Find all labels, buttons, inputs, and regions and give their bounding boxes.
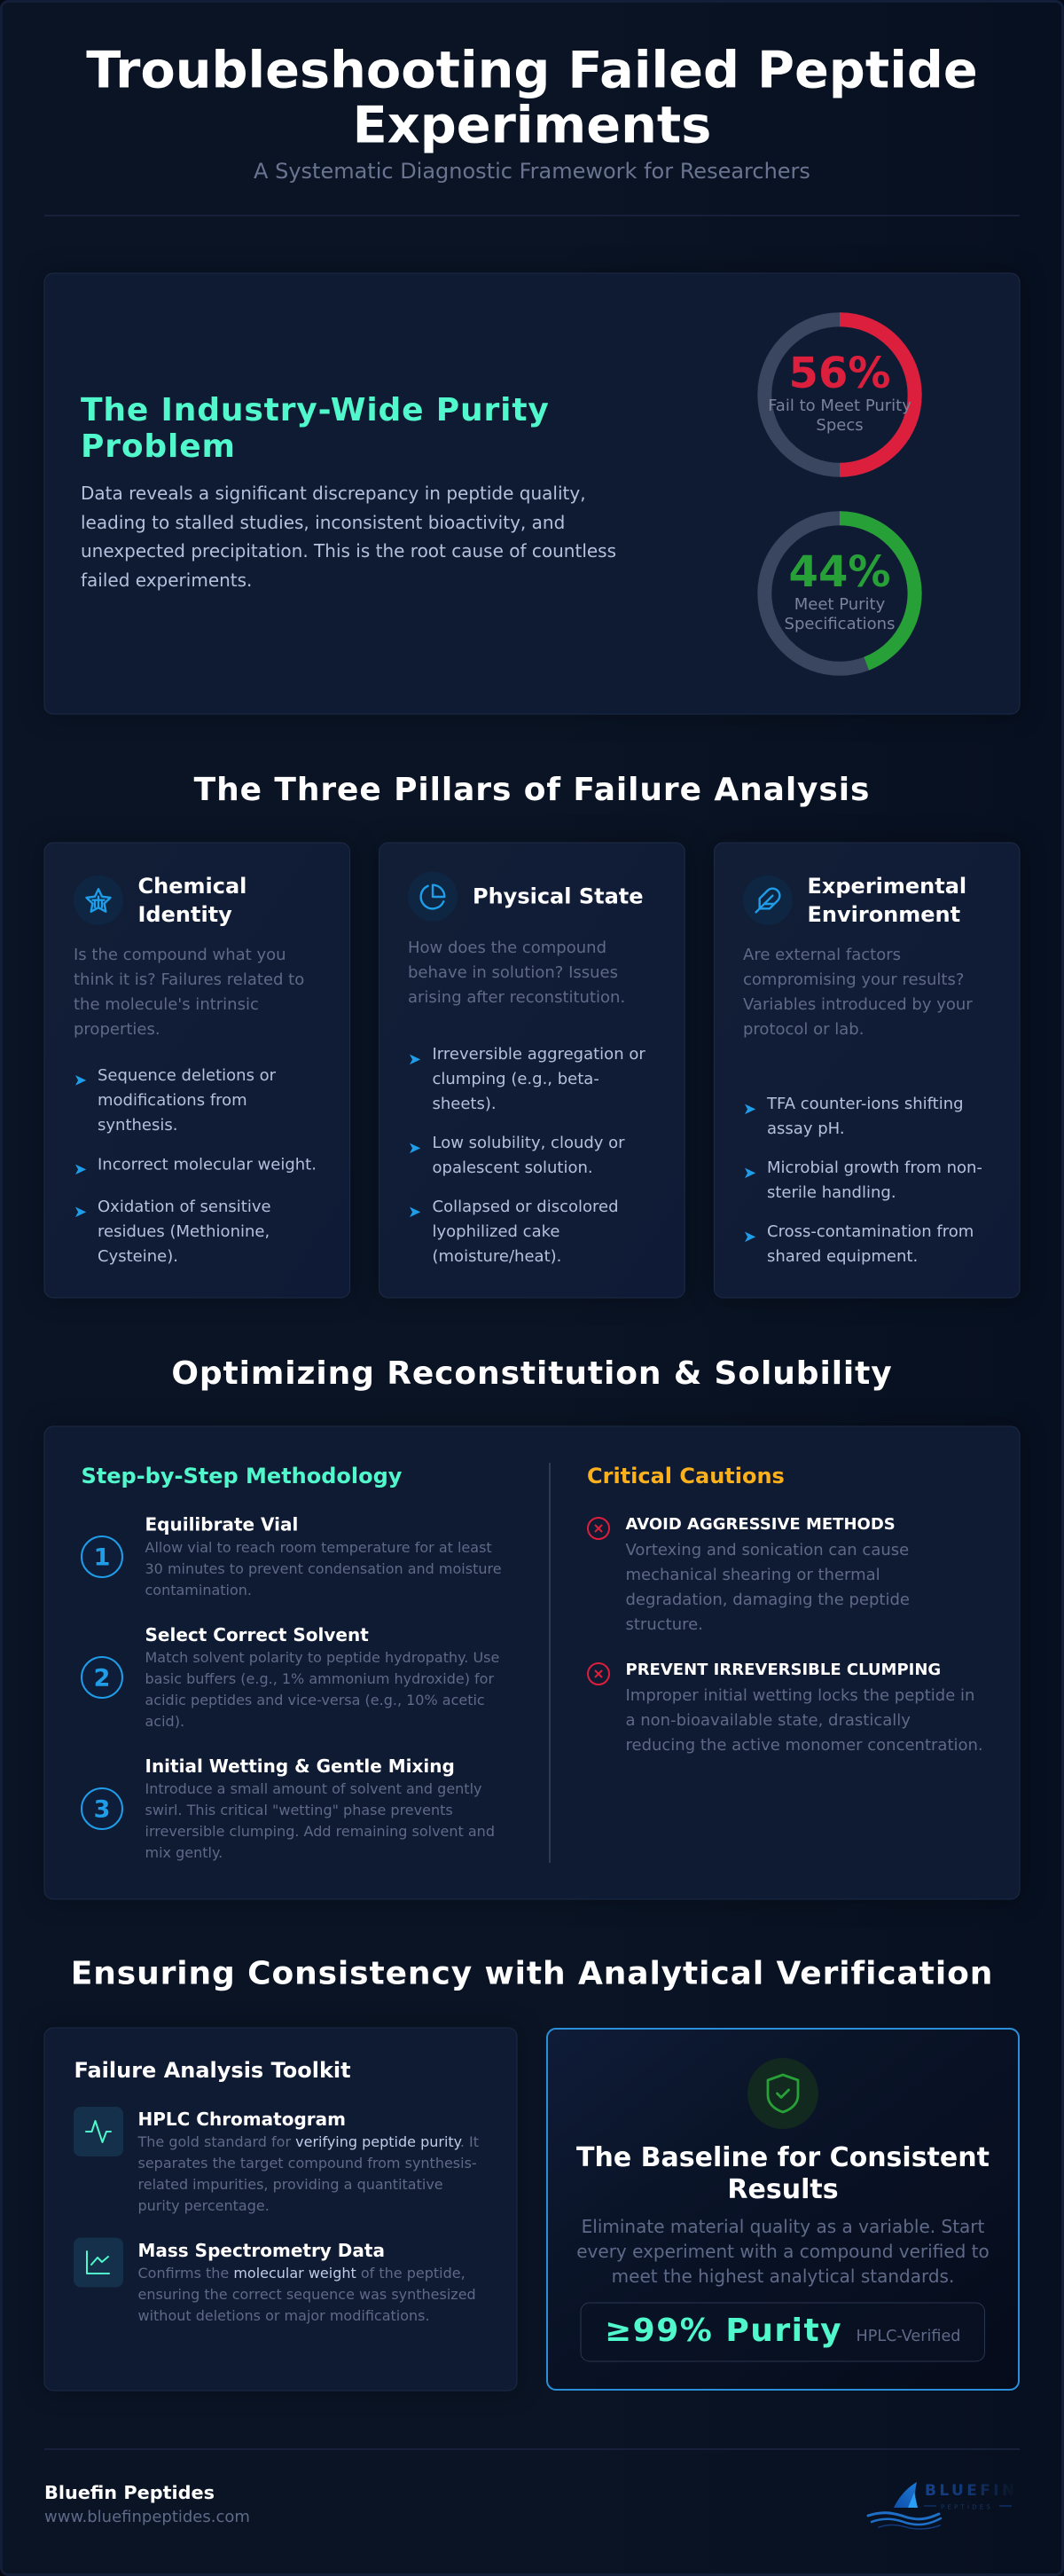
list: physical failures: sheets). <box>433 1095 497 1113</box>
text block: baseline description: meet the highest analytical standards. <box>612 2266 954 2287</box>
list: physical failures: Low solubility, cloudy or <box>433 1134 625 1152</box>
heading: baseline: Results <box>727 2174 839 2205</box>
text block: environment description: protocol or lab. <box>743 1020 864 1039</box>
list: chemical failures: Sequence deletions or <box>98 1066 277 1085</box>
donut chart: 56% fail: Fail to Meet Purity <box>768 397 911 415</box>
donut chart: 44% meet <box>764 518 915 669</box>
donut chart: 56% fail: Specs <box>816 416 864 435</box>
heading: analytical verification: Ensuring Consistency with Analytical Verification <box>71 1955 993 1992</box>
list: chemical failures: ➤ <box>74 1160 87 1179</box>
tool: HPLC: The gold standard for <box>137 2133 295 2150</box>
header <box>44 41 1020 216</box>
list: environment failures <box>743 1095 982 1266</box>
panel: failure analysis toolkit <box>44 2028 517 2391</box>
caution 1 <box>588 1515 910 1634</box>
list: environment failures: ➤ <box>743 1228 756 1246</box>
list: chemical failures: synthesis. <box>98 1116 177 1135</box>
text block: purity description: failed experiments. <box>81 569 252 591</box>
caution 2: PREVENT IRREVERSIBLE CLUMPING <box>626 1661 941 1679</box>
footer: brand: Bluefin Peptides <box>44 2482 215 2503</box>
heading: three pillars: The Three Pillars of Failure Analysis <box>194 772 870 808</box>
text block: chemical description: Is the compound what you <box>74 946 286 964</box>
step 2: acidic peptides and vice-versa (e.g., 10% acetic <box>145 1692 485 1708</box>
list: environment failures: assay pH. <box>767 1119 845 1138</box>
list: physical failures: Collapsed or discolored <box>433 1198 619 1216</box>
list: chemical failures: Oxidation of sensitive <box>98 1198 271 1216</box>
tool: mass spectrometry: without deletions or major modifications. <box>138 2307 430 2324</box>
logo: Bluefin Peptides: PEPTIDES <box>941 2503 993 2510</box>
list: physical failures: clumping (e.g., beta- <box>433 1070 599 1088</box>
step 2 <box>82 1624 499 1730</box>
icon: shield check <box>747 2058 818 2129</box>
step 1: Equilibrate Vial <box>145 1513 298 1535</box>
list: chemical failures: ➤ <box>74 1203 87 1221</box>
text block: chemical description: the molecule's intrinsic <box>74 995 259 1014</box>
footer: brand <box>44 2482 250 2526</box>
step 1: 1 <box>94 1543 110 1572</box>
icon: feather <box>743 876 793 925</box>
icon: star <box>74 876 123 925</box>
list: chemical failures: modifications from <box>98 1091 247 1110</box>
caution 2: reducing the active monomer concentration. <box>626 1736 983 1755</box>
step 3: swirl. This critical "wetting" phase prevents <box>145 1802 453 1818</box>
list: chemical failures: ➤ <box>74 1072 87 1089</box>
step 1 <box>82 1513 502 1598</box>
text block: chemical description: properties. <box>74 1020 160 1039</box>
list: chemical failures: Cysteine). <box>98 1247 178 1266</box>
step 1: contamination. <box>145 1582 252 1598</box>
step 2: Select Correct Solvent <box>145 1624 369 1645</box>
text block: environment description: Variables introduced by your <box>743 995 973 1014</box>
icon: pie chart <box>408 872 458 922</box>
heading: chemical identity: Chemical <box>138 874 246 899</box>
caution 2: Improper initial wetting locks the peptide in <box>626 1686 974 1705</box>
list: environment failures: ➤ <box>743 1100 756 1119</box>
donut chart: 56% fail <box>764 319 915 470</box>
subtitle: A Systematic Diagnostic Framework for Researchers <box>254 159 810 184</box>
footer: brand: www.bluefinpeptides.com <box>44 2508 250 2526</box>
heading: purity problem: Problem <box>81 428 236 465</box>
text block: environment description: compromising your results? <box>743 970 964 989</box>
step 3: irreversible clumping. Add remaining solvent and <box>145 1823 495 1840</box>
tool: mass spectrometry: molecular weight of the peptide, <box>233 2265 466 2281</box>
tool: mass spectrometry: Confirms the <box>138 2265 233 2281</box>
tool: HPLC: separates the target compound from synthesis- <box>138 2155 477 2172</box>
heading: purity problem: The Industry-Wide Purity <box>81 392 550 428</box>
logo: Bluefin Peptides <box>868 2482 1018 2529</box>
caution 1: Vortexing and sonication can cause <box>626 1541 909 1559</box>
donut chart: 44% meet: Meet Purity <box>794 595 886 614</box>
step 3: 3 <box>94 1795 110 1824</box>
heading: methodology: Step-by-Step Methodology <box>82 1464 403 1488</box>
step 2: basic buffers (e.g., 1% ammonium hydroxide) for <box>145 1670 494 1687</box>
caution 2 <box>588 1661 983 1755</box>
callout: purity: ≥99% Purity <box>605 2313 842 2349</box>
list: physical failures: ➤ <box>408 1139 421 1158</box>
step 3: Initial Wetting & Gentle Mixing <box>145 1755 455 1777</box>
callout: purity: HPLC-Verified <box>857 2328 960 2345</box>
donut chart: 56% fail: 56% <box>789 349 890 398</box>
caution 2: a non-bioavailable state, drastically <box>626 1711 911 1730</box>
text block: purity description: Data reveals a significant discrepancy in peptide quality, <box>81 483 586 504</box>
text block: baseline description: Eliminate material quality as a variable. Start <box>582 2216 985 2237</box>
list: physical failures: opalescent solution. <box>433 1158 593 1177</box>
list: physical failures <box>408 1045 645 1266</box>
tool: HPLC: related impurities, providing a quantitative <box>138 2176 443 2193</box>
list: chemical failures: residues (Methionine, <box>98 1222 270 1241</box>
text block: physical description: arising after reconstitution. <box>408 988 625 1007</box>
step 3: mix gently. <box>145 1844 223 1861</box>
tool: HPLC: HPLC Chromatogram <box>138 2109 346 2130</box>
text block: physical description: behave in solution? Issues <box>408 963 618 982</box>
list: environment failures: Cross-contamination from <box>767 1222 974 1241</box>
caution 1: degradation, damaging the peptide <box>626 1590 910 1609</box>
text block: purity description: unexpected precipitation. This is the root cause of countless <box>81 540 616 562</box>
list: environment failures: Microbial growth from non- <box>767 1158 982 1177</box>
heading: experimental environment: Environment <box>807 902 960 927</box>
panel: baseline for consistent results <box>547 2029 1019 2390</box>
list: environment failures: ➤ <box>743 1164 756 1182</box>
step 3 <box>82 1755 495 1861</box>
list: chemical failures: Incorrect molecular weight. <box>98 1155 317 1174</box>
list: physical failures: lyophilized cake <box>433 1222 559 1241</box>
tool: HPLC: verifying peptide purity. It <box>295 2133 479 2150</box>
panel: physical state <box>379 843 685 1298</box>
heading: chemical identity: Identity <box>138 902 232 927</box>
tool: mass spectrometry <box>74 2237 476 2324</box>
title: Experiments <box>353 96 711 154</box>
step 2: 2 <box>94 1664 110 1692</box>
panel: reconstitution and solubility <box>44 1426 1020 1899</box>
donut chart: 44% meet: 44% <box>789 547 890 597</box>
tool: HPLC: purity percentage. <box>138 2197 270 2214</box>
list: chemical failures <box>74 1066 317 1266</box>
caution 1: structure. <box>626 1615 703 1634</box>
panel: purity problem <box>44 273 1020 714</box>
list: physical failures: (moisture/heat). <box>433 1247 561 1266</box>
step 3: Introduce a small amount of solvent and gently <box>145 1780 482 1797</box>
text block: environment description: Are external factors <box>743 946 901 964</box>
list: physical failures: Irreversible aggregation or <box>433 1045 645 1064</box>
logo: Bluefin Peptides: BLUEFIN <box>925 2482 1018 2500</box>
text block: chemical description: think it is? Failures related to <box>74 970 304 989</box>
heading: reconstitution: Optimizing Reconstitution & Solubility <box>171 1355 893 1392</box>
heading: experimental environment: Experimental <box>807 874 966 899</box>
step 2: Match solvent polarity to peptide hydropathy. Use <box>145 1649 499 1666</box>
caution 1: AVOID AGGRESSIVE METHODS <box>626 1515 896 1534</box>
tool: HPLC <box>74 2107 479 2214</box>
step 2: acid). <box>145 1713 184 1730</box>
list: environment failures: shared equipment. <box>767 1247 918 1266</box>
list: physical failures: ➤ <box>408 1203 421 1221</box>
step 1: Allow vial to reach room temperature for at least <box>145 1539 492 1556</box>
donut chart: 44% meet: Specifications <box>785 615 895 633</box>
list: physical failures: ➤ <box>408 1050 421 1069</box>
heading: physical state: Physical State <box>473 884 644 908</box>
list: environment failures: sterile handling. <box>767 1183 896 1202</box>
panel: experimental environment <box>715 843 1020 1298</box>
step 1: 30 minutes to prevent condensation and moisture <box>145 1560 502 1577</box>
tool: mass spectrometry: Mass Spectrometry Data <box>138 2240 385 2261</box>
heading: cautions: Critical Cautions <box>587 1464 785 1488</box>
text block: physical description: How does the compound <box>408 939 606 957</box>
text block: baseline description: every experiment with a compound verified to <box>576 2241 990 2262</box>
tool: mass spectrometry: ensuring the correct sequence was synthesized <box>138 2286 476 2303</box>
heading: baseline: The Baseline for Consistent <box>576 2142 990 2173</box>
panel: chemical identity <box>44 843 349 1298</box>
heading: toolkit: Failure Analysis Toolkit <box>74 2058 351 2083</box>
caution 1: mechanical shearing or thermal <box>626 1566 880 1584</box>
list: environment failures: TFA counter-ions shifting <box>766 1095 964 1113</box>
text block: purity description: leading to stalled studies, inconsistent bioactivity, and <box>81 512 565 533</box>
title: Troubleshooting Failed Peptide <box>86 41 978 99</box>
callout: purity <box>581 2303 984 2361</box>
